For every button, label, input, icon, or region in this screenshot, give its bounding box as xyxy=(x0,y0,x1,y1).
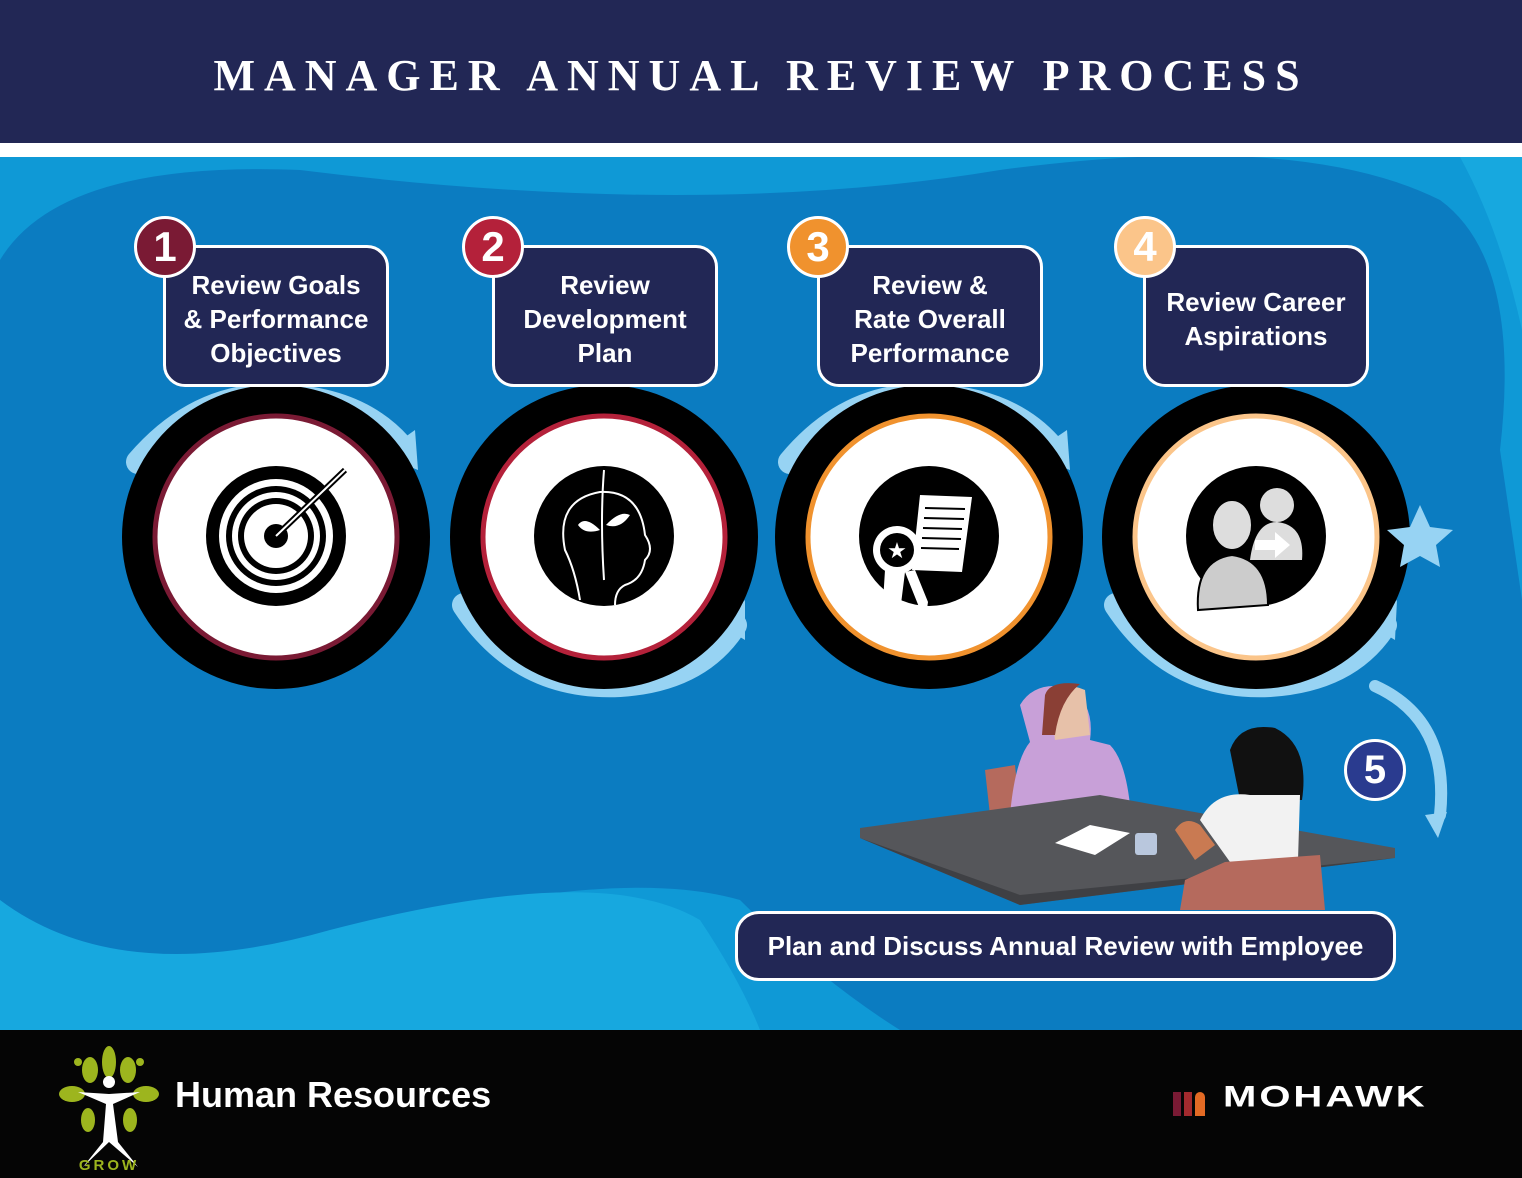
step 1 label xyxy=(163,245,389,387)
step 2 label: Review xyxy=(560,270,650,300)
step 5 label: Plan and Discuss Annual Review with Employee xyxy=(768,931,1363,961)
step 2 label: Plan xyxy=(578,338,632,368)
step 3 label: Performance xyxy=(851,338,1009,368)
step 5 label xyxy=(735,911,1396,981)
step 1 label: Objectives xyxy=(210,338,342,368)
step circles xyxy=(122,385,1410,689)
arrow 1 xyxy=(138,396,418,470)
logo: grow tree xyxy=(59,1046,159,1172)
badge 5 xyxy=(1344,739,1406,801)
step 2 label xyxy=(492,245,718,387)
arrow 3 xyxy=(790,396,1070,470)
step 3 label: Rate Overall xyxy=(854,304,1006,334)
badge 4 xyxy=(1114,216,1176,278)
step 2 label: Development xyxy=(523,304,687,334)
step 4 label: Aspirations xyxy=(1184,321,1328,351)
header xyxy=(0,0,1522,143)
footer xyxy=(0,1030,1522,1178)
title: MANAGER ANNUAL REVIEW PROCESS xyxy=(213,51,1309,100)
arrow 2 xyxy=(464,600,745,685)
badge 1: 1 xyxy=(153,223,177,270)
badge 2: 2 xyxy=(481,223,505,270)
badge 3: 3 xyxy=(806,223,830,270)
step 1 label: & Performance xyxy=(184,304,368,334)
badge 3 xyxy=(787,216,849,278)
icon: star xyxy=(1387,505,1453,567)
arrow 4 xyxy=(1116,600,1397,685)
step 4 label xyxy=(1143,245,1369,387)
main panel xyxy=(0,157,1522,1030)
badge 5: 5 xyxy=(1364,748,1386,792)
illustration: meeting xyxy=(860,683,1395,910)
icon: people xyxy=(1186,466,1326,610)
badge 2 xyxy=(462,216,524,278)
badge 4: 4 xyxy=(1133,223,1157,270)
icon: certificate xyxy=(859,466,999,622)
step 4 label: Review Career xyxy=(1166,287,1346,317)
icon: head with plant xyxy=(534,466,674,606)
arrow 5 xyxy=(1375,686,1447,838)
badge 1 xyxy=(134,216,196,278)
icon: target xyxy=(206,466,346,606)
step 3 label: Review & xyxy=(872,270,988,300)
logo: mohawk: MOHAWK xyxy=(1223,1080,1428,1113)
step 1 label: Review Goals xyxy=(191,270,361,300)
text: Human Resources: Human Resources xyxy=(175,1074,491,1115)
icon: certificate: ★ xyxy=(887,538,907,563)
step 3 label xyxy=(817,245,1043,387)
